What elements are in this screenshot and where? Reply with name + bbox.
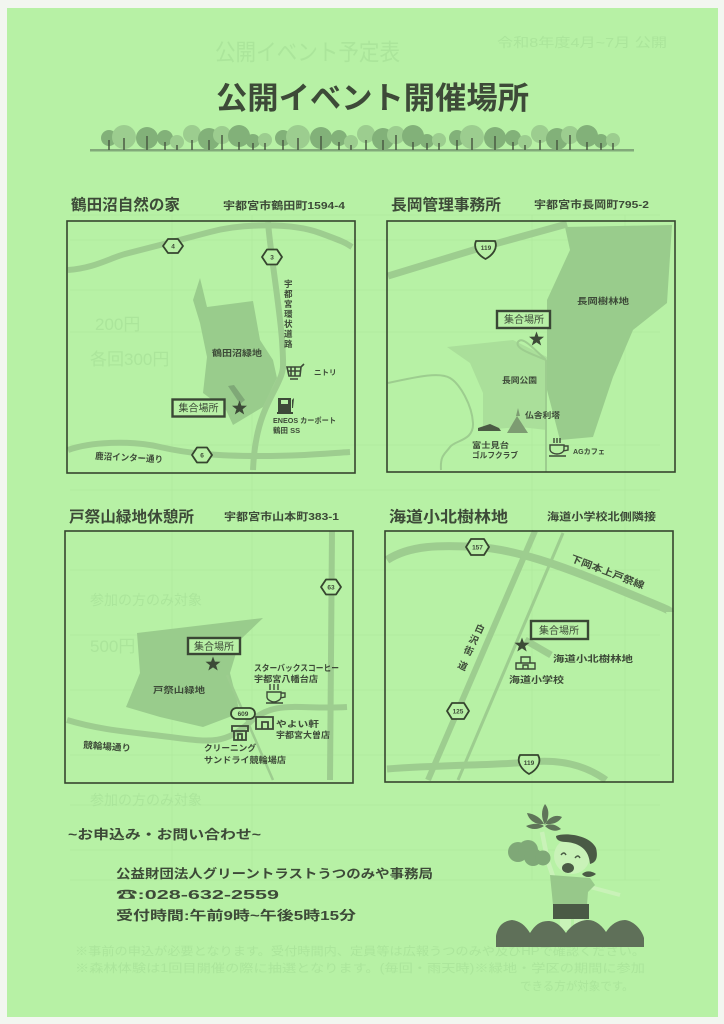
legs	[560, 918, 584, 930]
label: temple: 仏舎利塔	[525, 410, 560, 420]
address: 宇都宮市長岡町795-2	[534, 198, 649, 211]
label: road name: 競輪場通り	[83, 739, 132, 753]
faint show-through from reverse side: 公開イベント予定表	[215, 39, 400, 65]
panel: 戸祭山緑地休憩所	[65, 507, 353, 783]
icon: star	[206, 656, 220, 670]
ponytail	[582, 871, 596, 877]
label: ring road: 環	[284, 309, 293, 319]
route 3 sign	[262, 250, 282, 264]
label: road name: 下岡本上戸祭線	[569, 553, 647, 592]
route 63 sign	[321, 580, 341, 594]
label: shirasawa road: 道	[456, 659, 470, 674]
faint show-through from reverse side: 令和8年度4月~7月 公開	[497, 35, 667, 50]
map: park	[447, 340, 547, 430]
route 157 sign	[466, 539, 489, 555]
route 119 sign: 119	[481, 245, 492, 252]
route 119 sign	[475, 241, 496, 259]
meeting point box	[497, 311, 550, 328]
map: roads	[68, 222, 352, 470]
panel: 長岡管理事務所: ゴルフクラブ	[472, 450, 518, 460]
text block: contact details: 公益財団法人グリーントラストうつのみや事務局	[116, 866, 433, 881]
map frame	[67, 221, 355, 473]
heading: contact: ~お申込み・お問い合わせ~	[68, 827, 261, 842]
panel: 長岡管理事務所	[387, 195, 675, 472]
label: cafe: AGカフェ	[573, 447, 605, 456]
title: 公開イベント開催場所	[216, 81, 529, 116]
meeting point box	[172, 400, 224, 416]
route 63 sign: 63	[327, 584, 335, 592]
faint show-through from reverse side: ※森林体験は1回目開催の際に抽選となります。(毎回・雨天時)※緑地・学区の期間に参加	[75, 961, 645, 975]
panel: 海道小北樹林地	[385, 507, 673, 782]
icon: temple	[507, 408, 528, 433]
icon: shop yayoi	[256, 717, 273, 729]
label: golf: 富士見台	[472, 440, 509, 450]
panel: 鶴田沼自然の家	[67, 195, 355, 473]
route 119 sign: 119	[524, 760, 535, 767]
fruit cluster	[508, 840, 550, 866]
illustration: child holding a branch	[496, 804, 644, 947]
faint show-through from reverse side: ※事前の申込が必要となります。受付時間内、定員等は広報うつのみや及びHPで確認ください。	[75, 944, 645, 958]
label: yayoi: やよい軒	[276, 719, 320, 729]
route 157 sign: 157	[472, 544, 483, 552]
text block: contact details: ☎:028-632-2559	[116, 887, 279, 902]
map frame	[385, 531, 673, 782]
map: woods	[547, 225, 672, 440]
label: shirasawa road	[456, 622, 486, 674]
shorts	[553, 904, 589, 919]
label: Starbucks: スターバックスコーヒー	[254, 663, 339, 673]
icon: school	[516, 657, 535, 669]
label: green area: 戸祭山緑地	[153, 685, 206, 695]
label: shirasawa road: 白	[473, 622, 486, 637]
icon: shop cleaning	[232, 726, 248, 740]
icon: star	[232, 400, 247, 414]
route 119 sign	[519, 755, 539, 774]
faint show-through from reverse side: 参加の方のみ対象	[90, 592, 202, 608]
text block: contact details: 受付時間:午前9時~午後5時15分	[116, 908, 356, 923]
label: ring road	[284, 279, 293, 349]
label: ring road: 宇	[284, 279, 293, 289]
label: cleaning: クリーニング	[204, 743, 256, 753]
icon: gas pump	[277, 398, 294, 414]
faint show-through from reverse side: 500円	[90, 637, 135, 656]
bushes	[496, 920, 644, 947]
route sign 609	[231, 708, 255, 719]
faint show-through from reverse side: できる方が対象です。	[520, 979, 634, 993]
route 4 sign: 4	[171, 244, 175, 250]
map: roads	[388, 224, 567, 472]
label: 鶴田SS: 鶴田 SS	[273, 425, 300, 435]
label: green area: 鶴田沼緑地	[212, 348, 263, 358]
heading: 鶴田沼自然の家	[71, 195, 180, 214]
heading: 戸祭山緑地休憩所	[69, 507, 194, 526]
panel: 戸祭山緑地休憩所: 宇都宮大曽店	[276, 730, 331, 740]
label: woods: 長岡樹林地	[577, 296, 630, 306]
map: roads	[67, 531, 347, 780]
label: ring road: 宮	[284, 299, 293, 309]
eyes	[561, 853, 580, 858]
meeting point box: 集合場所	[178, 402, 218, 414]
faint show-through from reverse side: 各回300円	[90, 350, 169, 369]
map frame	[387, 221, 675, 472]
icon: star	[514, 638, 530, 652]
map: green area	[126, 618, 263, 727]
branch leaves	[526, 804, 562, 831]
decoration: row of trees	[90, 125, 634, 152]
shirt	[550, 875, 595, 905]
faint show-through from reverse side: 参加の方のみ対象	[90, 792, 202, 808]
label: ring road: 都	[284, 289, 293, 299]
mouth	[562, 863, 574, 873]
panel: 戸祭山緑地休憩所: 宇都宮八幡台店	[254, 674, 319, 684]
route 4 sign	[163, 239, 183, 253]
route 125 sign: 125	[453, 708, 464, 716]
label: ring road: 道	[284, 329, 293, 339]
label: shirasawa road: 沢	[467, 633, 481, 648]
label: school: 海道小学校	[509, 674, 564, 685]
label: Nitori: ニトリ	[314, 368, 336, 377]
icon: cafe	[266, 684, 285, 703]
icon: star	[529, 332, 544, 346]
meeting point box: 集合場所	[194, 640, 234, 653]
meeting point box	[188, 638, 240, 654]
address: 海道小学校北側隣接	[547, 510, 657, 523]
label: shirasawa road: 街	[462, 644, 476, 659]
panel: 戸祭山緑地休憩所: サンドライ競輪場店	[204, 755, 287, 765]
heading: 海道小北樹林地	[389, 507, 509, 526]
map frame	[65, 531, 353, 783]
meeting point box: 集合場所	[539, 624, 579, 637]
hair	[556, 834, 597, 864]
label: road name: 鹿沼インター通り	[95, 450, 163, 465]
label: ring road: 状	[284, 319, 293, 329]
meeting point box	[531, 621, 588, 639]
faint show-through from reverse side	[70, 35, 667, 993]
route 6 sign	[192, 448, 212, 462]
route 3 sign: 3	[270, 254, 274, 262]
icon: golf	[478, 424, 501, 431]
route 125 sign	[447, 703, 469, 719]
icon: cafe	[549, 438, 568, 456]
map: green area	[193, 278, 277, 425]
route 6 sign: 6	[200, 452, 204, 460]
address: 宇都宮市鶴田町1594-4	[223, 199, 345, 212]
raised arm and branch	[542, 832, 555, 882]
label: park: 長岡公園	[502, 376, 537, 385]
text block: contact details	[116, 866, 433, 923]
icon: cart	[287, 364, 304, 379]
map: roads	[387, 531, 670, 780]
face	[554, 838, 590, 874]
faint show-through from reverse side: 200円	[95, 315, 140, 334]
label: ring road: 路	[284, 339, 293, 349]
label: woods: 海道小北樹林地	[553, 653, 633, 664]
route sign 609: 609	[238, 711, 249, 718]
other arm	[590, 887, 620, 895]
meeting point box: 集合場所	[504, 313, 544, 326]
label: ENEOS: ENEOS カーポート	[273, 416, 336, 425]
heading: 長岡管理事務所	[391, 195, 501, 214]
address: 宇都宮市山本町383-1	[224, 510, 339, 523]
